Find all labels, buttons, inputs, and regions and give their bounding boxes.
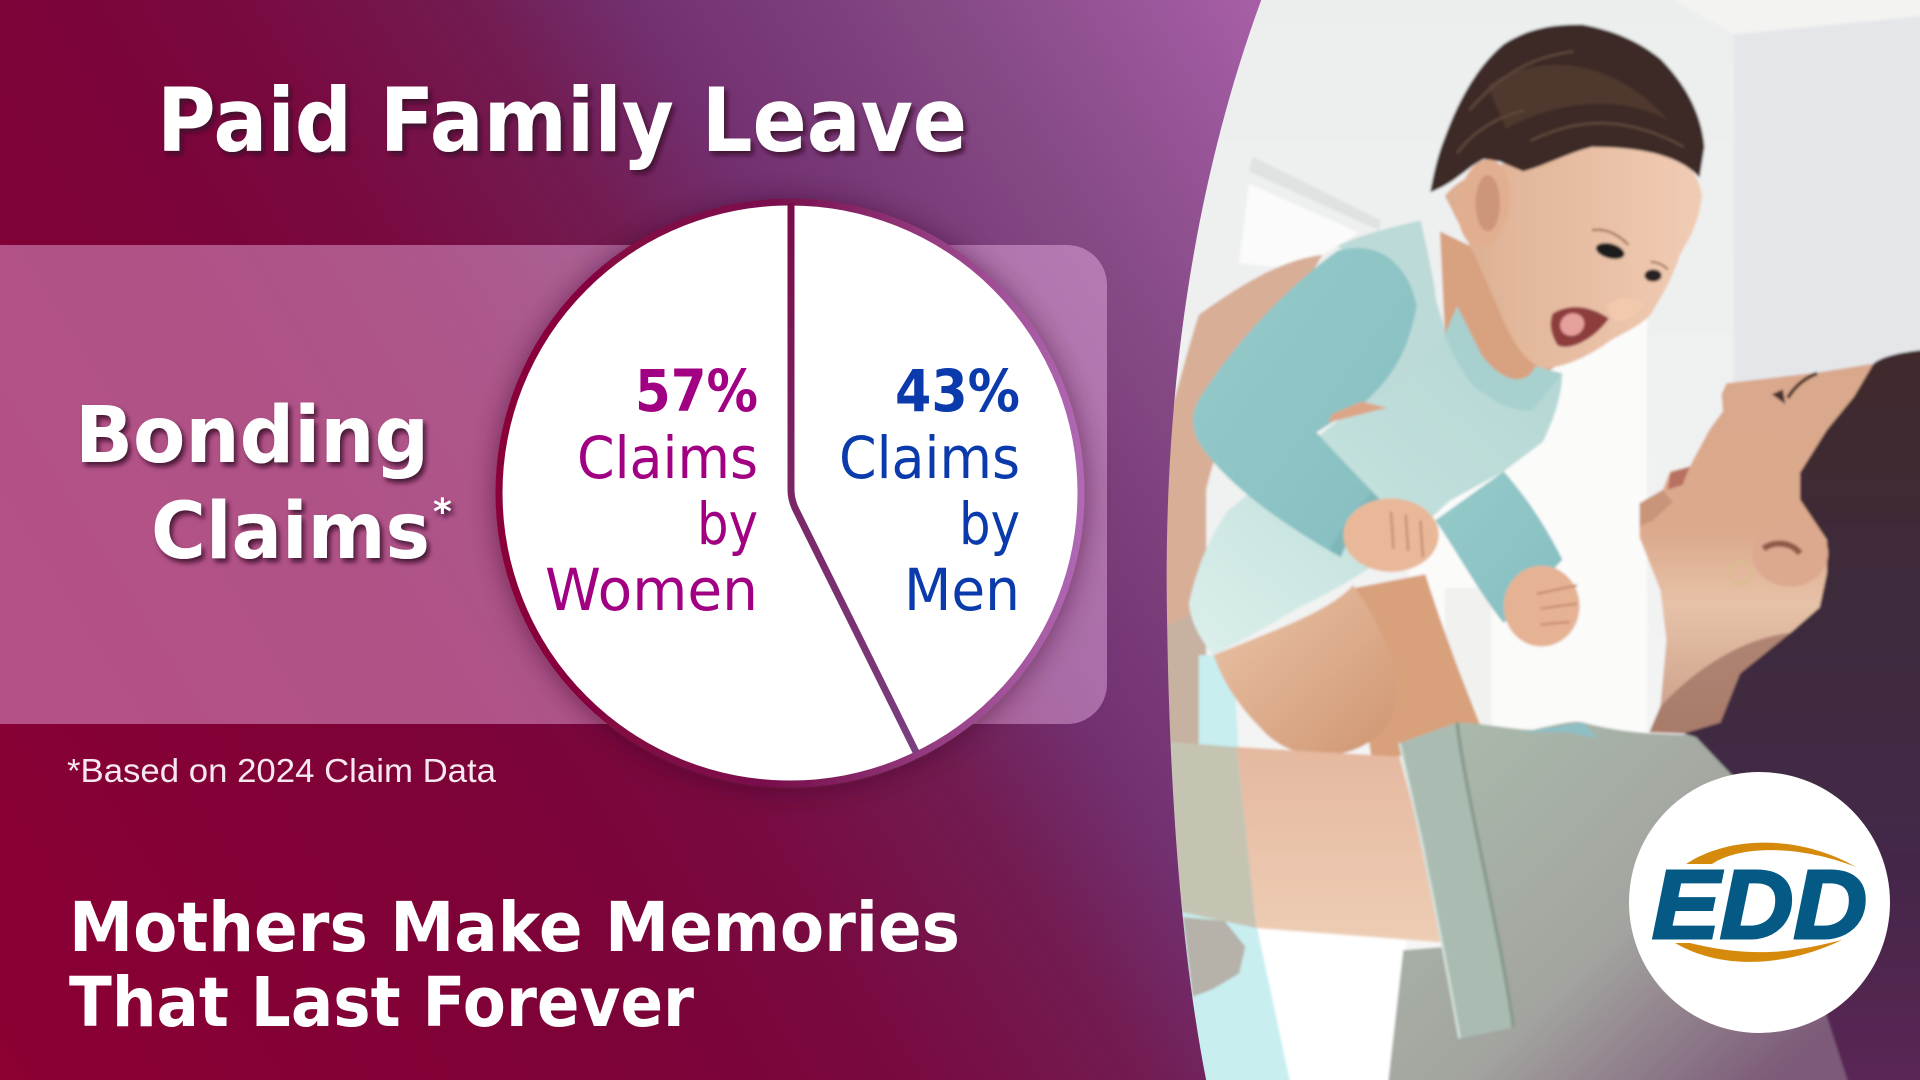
tagline — [69, 888, 960, 1043]
baby sleeve — [1193, 248, 1417, 557]
women share label: Women — [545, 556, 758, 624]
bonding claims heading: * — [433, 492, 452, 533]
footnote: *Based on 2024 Claim Data — [67, 752, 497, 789]
baby collar — [1445, 306, 1562, 410]
baby — [1189, 24, 1704, 759]
EDD logo: EDD — [1652, 850, 1867, 959]
baby hands — [1343, 498, 1580, 647]
curtain and floor light — [1176, 655, 1408, 1080]
women share label: 57% — [635, 357, 758, 425]
men share label: Men — [904, 556, 1020, 624]
bonding claims panel — [0, 245, 1107, 724]
men share label: Claims — [839, 424, 1020, 492]
title: Paid Family Leave — [157, 69, 967, 172]
pie chart — [499, 202, 1081, 784]
men share label — [839, 357, 1020, 624]
mother ear and earring — [1728, 538, 1830, 586]
women share label — [545, 357, 758, 624]
tagline: That Last Forever — [69, 963, 694, 1043]
EDD logo — [1629, 772, 1890, 1033]
mother shirt — [1387, 722, 1850, 1080]
women share label: by — [697, 490, 758, 558]
bonding claims heading: Claims — [151, 487, 430, 577]
tagline: Mothers Make Memories — [69, 888, 960, 968]
baby head and neck — [1430, 24, 1704, 393]
photo: mother lifting baby — [1139, 0, 1920, 1080]
mother face and neck — [1640, 364, 1873, 735]
mother hair — [1684, 349, 1920, 1080]
men share label: 43% — [895, 357, 1020, 425]
baby shoulder — [1338, 220, 1446, 380]
mother near arm — [1157, 741, 1449, 997]
men share label: by — [959, 490, 1020, 558]
mother far arm — [1157, 255, 1322, 759]
bonding claims heading: Bonding — [75, 391, 429, 481]
bonding claims heading — [75, 391, 452, 577]
women share label: Claims — [577, 424, 758, 492]
